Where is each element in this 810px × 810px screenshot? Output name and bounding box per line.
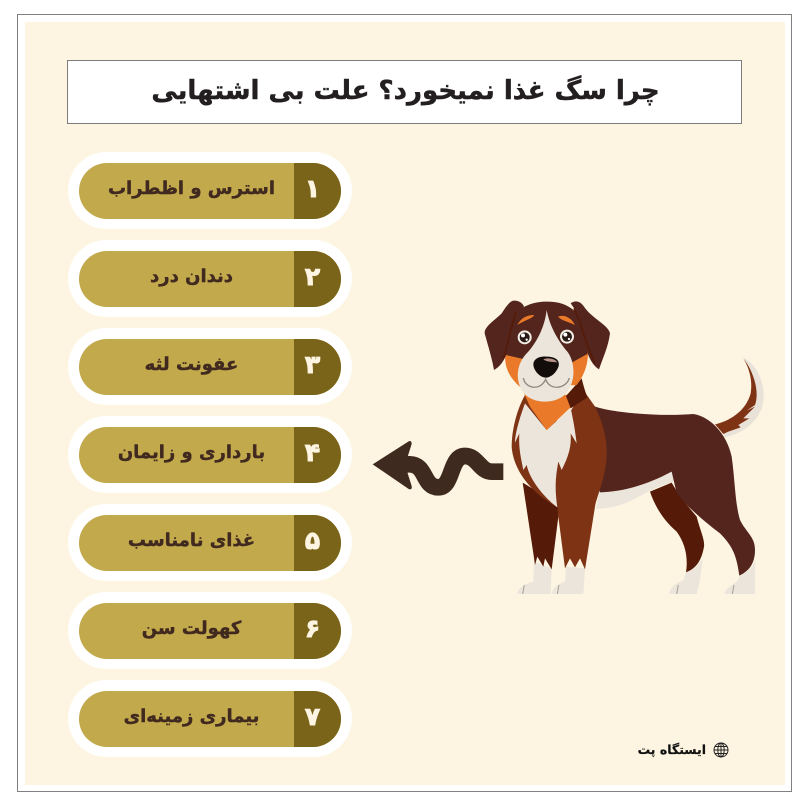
dog near front leg and chest <box>555 390 607 569</box>
title box <box>67 60 742 124</box>
brand name: ایستگاه پت <box>638 742 706 757</box>
dog nose <box>533 357 559 378</box>
title: چرا سگ غذا نمیخورد؟ علت بی اشتهایی <box>151 76 660 106</box>
dog tail <box>715 358 764 437</box>
list item 2: دندان درد <box>150 266 233 287</box>
dog ears <box>485 301 524 370</box>
list item 5 <box>68 504 352 581</box>
dog eyebrows <box>517 315 534 325</box>
list item 3 <box>68 328 352 405</box>
dog back far leg <box>650 483 704 572</box>
list item 2: ۲ <box>305 262 320 291</box>
list item 3: عفونت لثه <box>145 354 238 375</box>
list item 6: کهولت سن <box>142 618 241 639</box>
list item 4: بارداری و زایمان <box>118 442 265 463</box>
list item 5: ۵ <box>305 526 320 555</box>
dog white paws <box>517 558 755 594</box>
illustration: dog <box>484 300 764 594</box>
list item 4: ۴ <box>305 438 320 467</box>
dog orange bib <box>524 393 571 430</box>
list item 7 <box>68 680 352 757</box>
dog collar <box>566 378 587 408</box>
dog head <box>485 301 610 402</box>
list item 6: ۶ <box>305 614 320 643</box>
list item 7: بیماری زمینه‌ای <box>124 706 259 727</box>
list item 1: استرس و اظطراب <box>108 178 275 199</box>
list item 1 <box>68 152 352 229</box>
dog belly <box>596 471 674 509</box>
icon: globe <box>714 742 728 758</box>
dog toe lines <box>523 585 734 594</box>
arrow pointing from dog to list <box>372 441 504 496</box>
dog muzzle and blaze <box>518 310 573 402</box>
dog far front leg <box>523 483 558 569</box>
list item 2 <box>68 240 352 317</box>
dog mouth <box>523 378 569 387</box>
list item 3: ۳ <box>305 350 320 379</box>
list item 1: ۱ <box>305 174 320 203</box>
list item 6 <box>68 592 352 669</box>
list item 5: غذای نامناسب <box>128 530 255 551</box>
list item 4 <box>68 416 352 493</box>
list item 7: ۷ <box>305 702 320 731</box>
dog eyes <box>518 330 574 344</box>
dog white chest <box>515 403 577 507</box>
dog body <box>590 406 755 576</box>
dog left chest fur <box>512 395 560 507</box>
